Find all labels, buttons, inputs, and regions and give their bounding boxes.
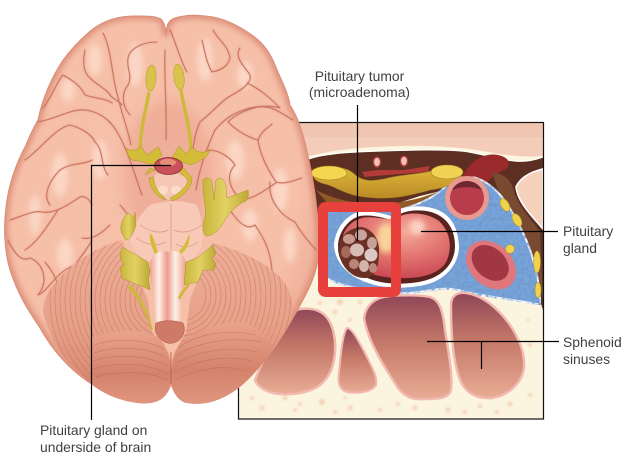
panel frame [238,122,544,419]
small arteries on chiasm [362,156,430,177]
cream bone background [239,123,543,419]
illustration: underside of brain [5,15,319,416]
pons speckle lines [136,204,202,262]
hypothalamus, mammillary bodies [154,172,187,200]
blue cavernous sinus [322,177,541,305]
lower lobe, right [172,322,272,403]
yellow optic chiasm [311,165,463,198]
cranial nerves in yellow [120,63,248,330]
callout leader: pituitary tumor [356,105,358,241]
thin nerve, right [178,284,190,300]
spinal cord cross-section [155,321,184,343]
optic tract, right arm [172,146,210,165]
sphenoid sinus 1 [255,309,335,394]
callout leader: pituitary gland [421,230,558,232]
optic nerve end: left [311,166,347,180]
label: pituitary gland: gland [563,240,597,256]
cerebellum [43,240,292,404]
left hemisphere [43,240,171,403]
sulci soft shadow [8,30,316,295]
panel: cross-section of sella turcica [239,123,543,419]
callout leader: pituitary gland on underside of brain [92,166,171,420]
gland body [342,214,450,278]
red vessel over dura [463,154,509,182]
outer rim shading [5,15,319,403]
red highlight box around tumor [323,207,396,292]
medulla [150,251,186,325]
white edge of dura [306,150,543,161]
pair of nerves on right of pons [203,178,248,236]
long thin nerve, left [128,284,153,330]
nerve dots [498,197,541,298]
sphenoid sinus 4 [451,293,524,398]
optic nerve end: right [431,165,463,179]
label: pituitary gland: Pituitary [563,223,613,239]
highlight [409,219,425,235]
midline notch [170,352,172,384]
carotid artery: lower [466,240,516,290]
brown lower right of dura [492,172,543,300]
nerve on left of pons [121,212,136,240]
sphenoid sinus 2 [338,328,376,393]
label: sphenoid sinuses: Sphenoid [563,334,622,350]
white capsule outline [334,206,459,288]
label: pituitary gland on underside of brain: Pituitary gland on [40,422,147,438]
folia lines, left [50,241,170,381]
amber shading under chiasm [316,190,438,208]
olfactory bulb and stalk, left [140,65,157,150]
label: pituitary tumor: (microadenoma) [309,84,410,100]
bone speckle [250,284,532,414]
sphenoid sinus 3 [364,295,451,399]
tract loops around hypothalamus [145,165,192,201]
label: pituitary gland on underside of brain: underside of brain [40,439,151,455]
dark brown dura band [306,150,543,310]
pons and brainstem [130,201,203,343]
brain outline [5,15,319,403]
cream wedge, upper right [516,169,543,229]
pons [130,201,203,262]
optic tract, left arm [126,146,162,165]
pituitary gland on brain [154,158,182,174]
label: pituitary tumor: Pituitary tumor [315,68,404,84]
cranial nerve bundle, lower left [120,247,150,290]
folia lines, right [176,243,292,370]
gyri highlights [29,38,296,271]
cranial nerve bundle, lower right [184,245,216,285]
olfactory bulb and stalk, right [172,63,191,150]
right hemisphere [172,243,292,403]
dark rim [338,210,455,284]
yellow highlight left lobe [377,223,395,253]
callout leader: sphenoid sinuses [427,342,559,369]
sulci lines [8,30,316,295]
carotid artery: upper [445,176,489,220]
label: sphenoid sinuses: sinuses [563,351,610,367]
lower lobe, left [90,331,171,403]
central pink shading [122,100,214,225]
small abducens nerves [150,234,190,254]
tumor [338,227,379,278]
peach tissue band [304,137,543,156]
pituitary gland [334,206,459,288]
